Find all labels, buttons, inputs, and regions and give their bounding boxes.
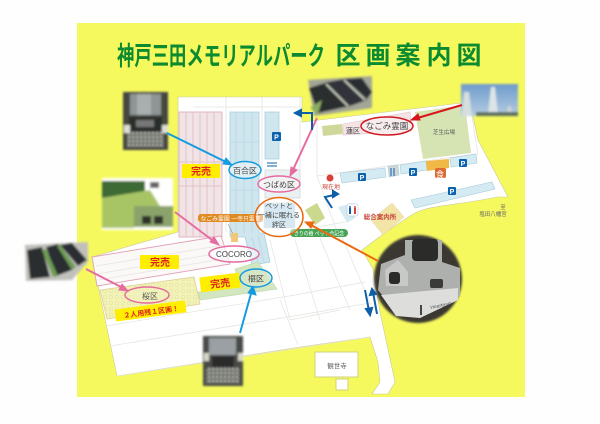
callout: kizuna pet section xyxy=(255,198,303,236)
sold out badge 3 xyxy=(199,273,241,292)
photo: lily grave xyxy=(123,92,168,150)
section: sakura plot xyxy=(100,277,200,319)
label: shrine: 塩田八幡宮 xyxy=(479,210,507,218)
callout: kaya section xyxy=(240,269,272,287)
yellow background panel xyxy=(77,23,525,397)
lawn: 芝生広場 xyxy=(433,128,455,136)
upper plots: 蓮区 xyxy=(346,126,360,135)
blue road arrows xyxy=(267,110,394,315)
toilet sign xyxy=(338,203,358,223)
general information office xyxy=(364,203,404,235)
map road lines xyxy=(106,97,478,376)
callout: tsubame section xyxy=(258,176,300,192)
callout: sakura section: 桜区 xyxy=(142,291,158,301)
remaining lots badge xyxy=(115,300,186,322)
upper plots xyxy=(322,112,412,136)
callout: kaya section: 榧区 xyxy=(248,274,264,284)
small green plot xyxy=(305,203,325,225)
arrows xyxy=(86,105,462,333)
green label: pet memorial xyxy=(290,229,348,238)
callout: lily section xyxy=(229,162,261,178)
sold out badge 3: 完売 xyxy=(209,276,231,291)
sold out badge 2: 完売 xyxy=(150,256,170,269)
orange label: columbarium xyxy=(198,214,263,222)
callout: kizuna pet section: 一緒に眠れる xyxy=(258,210,300,220)
parking strips xyxy=(340,154,495,208)
sold out badge 2 xyxy=(140,255,179,269)
callout: nagomi cemetery xyxy=(361,117,413,135)
map base xyxy=(92,97,508,394)
photo: circular grave closeup xyxy=(374,235,462,323)
restaurant area and icon xyxy=(426,159,449,179)
general information office: 総合案内所 xyxy=(364,212,397,221)
parking signs: P xyxy=(274,134,279,142)
remaining lots badge: ２人用残１区画！ xyxy=(123,304,179,320)
title: 神戸三田メモリアルパーク xyxy=(117,41,325,71)
photo: circular grave closeup: Hearteart xyxy=(430,301,452,311)
photo: lawn garden xyxy=(102,178,173,230)
orange label: columbarium: なごみ霊園 一寺只霊堂 xyxy=(200,214,261,222)
parking signs xyxy=(272,132,467,196)
parking signs: P xyxy=(450,189,455,196)
parking signs: P xyxy=(411,170,416,177)
callout: sakura section xyxy=(125,287,169,303)
title: 区画案内図 xyxy=(335,42,482,70)
temple building xyxy=(315,352,358,390)
sold out badge 1 xyxy=(182,164,220,178)
photo: grave rows left xyxy=(25,242,88,281)
section: tsubame block xyxy=(265,170,300,198)
parking signs: P xyxy=(360,175,365,182)
current location marker: 現在地 xyxy=(322,183,340,191)
callout: cocoro section: COCORO xyxy=(216,250,252,259)
label: shrine: 至 xyxy=(500,204,506,211)
photo: kaya grave xyxy=(203,336,243,386)
lawn xyxy=(415,105,471,159)
parking signs: P xyxy=(461,161,466,168)
small orange marker xyxy=(228,224,238,242)
callout: tsubame section: つばめ区 xyxy=(263,180,295,190)
section: cocoro outline xyxy=(92,236,230,286)
photo: grave rows top xyxy=(308,76,372,116)
current location marker xyxy=(322,174,340,191)
callout: nagomi cemetery: なごみ霊園 xyxy=(366,121,408,131)
green label: pet memorial: きりの樹 ペット合記念 xyxy=(294,230,344,238)
sold out badge 1: 完売 xyxy=(191,165,211,178)
label: shrine xyxy=(479,204,507,218)
callout: lily section: 百合区 xyxy=(233,166,257,176)
photo: statues xyxy=(461,84,518,116)
section: lily blue graves xyxy=(230,112,279,265)
callout: kizuna pet section: ペットと xyxy=(265,202,293,210)
section: kizuna block xyxy=(264,203,295,228)
temple building: 観世寺 xyxy=(327,361,347,370)
callout: kizuna pet section: 絆区 xyxy=(272,220,286,229)
callout: cocoro section xyxy=(209,246,259,262)
section: pink graves (sold out) xyxy=(179,112,222,237)
section: kaya plot xyxy=(198,262,277,300)
restaurant area and icon: 食 xyxy=(436,170,444,179)
